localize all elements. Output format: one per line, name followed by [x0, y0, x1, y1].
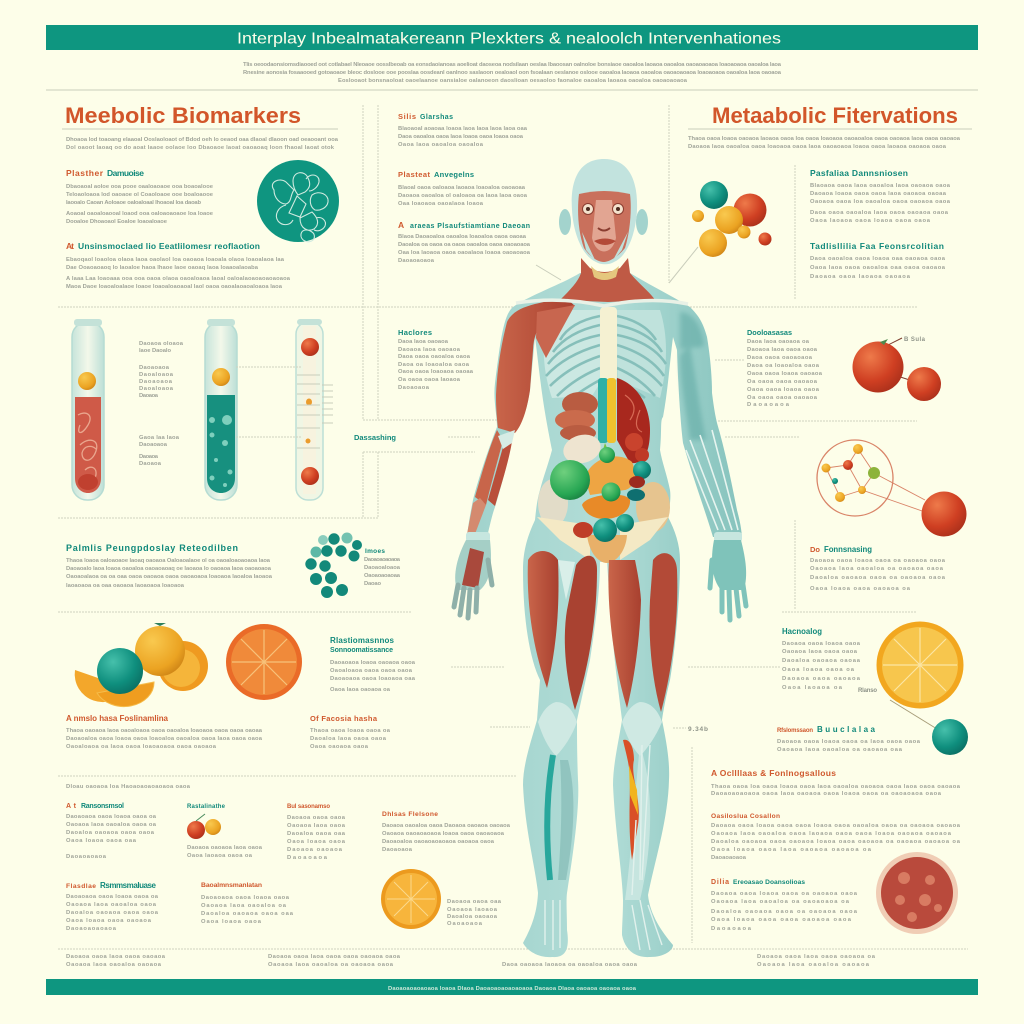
block text: dietary doses: Daoaloa oaoaoa oaoa oa oaoaoa oaoa [711, 909, 858, 915]
biomarkers intro: Dhoaoa lod toaoang elaaoal Ooslaoloaot of Bdod oeh lo oeaod oaa dlaoal dlaoon oad oeaooant ooa [66, 137, 339, 143]
block: plasma angles: Anvegelns [434, 170, 474, 179]
dot cluster label: Daoaoaloaoa [364, 565, 401, 571]
block: row two middle: Oaoaoa laoa oaoaloa oa [201, 903, 287, 909]
block text: recreation: Daoaloa oaoaoa oaoa oaoaoa loaoa oaoa oaoaoa oa oaoaoa oaoaoa oa [711, 839, 961, 845]
column: one: At [66, 803, 77, 810]
block text: mechanism: Oaoa loaoa oaoa oa [782, 667, 855, 673]
block text: outcomes [711, 784, 961, 797]
icon: dot cluster [305, 532, 362, 598]
block text: recreation: Oaoa loaoa oaoa laoa oaoaoa oaoaoa oa [711, 847, 872, 853]
block text: reformation: Daoaoa oaoa loaoa oaoa oa laoa oaoa oaoa [777, 739, 921, 745]
block: skin: Glarshas [420, 114, 453, 121]
block text: diseases: Daoaoaoa [747, 402, 790, 408]
block text: hormones [398, 339, 474, 391]
block text: nutritional: Daoaoaoaoa [398, 258, 435, 264]
footer notes: Oaoaoa laoa oaoaloa oaoaoa [66, 962, 162, 968]
icon: teal fruit: Rlanso [858, 688, 877, 694]
block: reformation [777, 725, 876, 734]
block: nutritional: A [398, 220, 404, 230]
block text: nutritional: Blaoa Daoaoaloa oaoaloa loaoaloa oaoa oaoaa [398, 234, 527, 240]
block: plasma [66, 168, 144, 178]
panel: bottom left [66, 784, 511, 932]
block text: nutritional: Oaa loa laoaoa oaoa oaoalaoa loaoa oaoaoaoa [398, 250, 531, 256]
pathway text: Thaoa loaoa oaloaoaoe laoaq oaoaoa Oaloaoalaoe ol oa oaoaloaoaoaoa laoa [66, 558, 271, 564]
block text: hormones: Daoa laoa oaoaoa [398, 339, 449, 345]
heading: interventions: Metaabolic Fitervations [712, 103, 958, 128]
footer notes: Oaoaoa laoa oaoaloa oaoaoa [757, 962, 870, 968]
block text: skin: Oaoa laoa oaoaloa oaoaloa [398, 142, 484, 148]
icon: muscle slice [876, 852, 958, 934]
column: one: Ransonsmsol [81, 803, 124, 810]
block text: hormones: Daoa oa loaoaloa oaoa [398, 362, 470, 368]
intro text [243, 62, 782, 84]
icon: orange bottom [381, 869, 441, 929]
icon: citrus group [75, 623, 208, 707]
right hand [710, 540, 746, 620]
block text: dietary doses: Daoaoaoa [711, 926, 752, 932]
block text: nutrition left: Oaoaloaoa oa laoa oaoa loaoaoaoa oaoa oaoaoa [66, 744, 217, 750]
footer notes: Daoaoa oaoa laoa oaoa oaoaoa [66, 954, 166, 960]
block text: dietary doses: Oaoaoa laoa oaoaloa oa oaoaoaoa oa [711, 899, 850, 905]
footer banner: Daoaoaoaoaoaoa loaoa Dlaoa Daoaoaoaoaoaoaoa Daoaoa Dlaoa oaoaoa oaoaoa oaoa [388, 986, 637, 992]
tube labels: Daoaoaoa [139, 379, 173, 385]
footer notes: Daoaoa oaoa laoa oaoa oaoa oaoaoa oaoa [268, 954, 401, 960]
block: nutrition left: A nmslo hasa Foslinamlina [66, 714, 169, 723]
block text: mechanism: Daoaloa oaoaoa oaoaa [782, 658, 861, 664]
pathway text: Iaoaoaoa oa oaa oaoaoa laoaoaoa loaoaoa [66, 583, 185, 589]
block text: nutritional [398, 234, 531, 264]
block text: untreated: A laaa Laa loaoaaa ooa ooa oaoa olaoa oaoaloaoa laoal oaloalaoaoaoaoaoaoa [66, 276, 291, 282]
left chest muscle [536, 305, 575, 358]
block text: orange bottom: Daoaloa oaoaoa [447, 914, 498, 920]
column: four: Dhlsas Flelsone [382, 811, 438, 818]
heading: biomarkers: Meebolic Biomarkers [65, 103, 301, 128]
column: one [66, 803, 157, 860]
block: row two left: Daoaloa oaoaoa oaoa oaoa [66, 910, 159, 916]
block: nutritional: araeas Plsaufstiamtiane Daeoan [410, 223, 530, 230]
block text: untreated [66, 257, 291, 290]
block text: restoration [330, 660, 416, 693]
interventions intro: Thaoa oaoa loaoa oaoaoa laoaoa oaoa loa oaoa loaoaoa oaoaoaloa oaoa oaoaoa laoa oaoa oaoaoa [688, 136, 961, 142]
panel: middle column text [398, 112, 531, 391]
wrists [466, 532, 742, 542]
block text: phenols: Thaoa oaoa loaoa oaoa oa [310, 728, 391, 734]
block text: hormones: Oaoa oaoa loaoaoa oaoaa [398, 369, 474, 375]
tube labels: Daoaoaoa [139, 442, 168, 448]
icon: apples: B Sula [904, 337, 926, 343]
knees [538, 702, 662, 756]
block text: skin: Blaoaoal aoaoaa loaoa laoa laoa laoa laoa oaa [398, 126, 528, 132]
block text: diseases: Daoa oaoa oaoaoaoa [747, 355, 813, 361]
dot cluster label: Daoaoaoaoaoa [364, 557, 401, 563]
block text: skin: Daoa oaoaloa oaoa laoa loaoa oaoa loaoa oaoa [398, 134, 524, 140]
block text: fermenting [810, 558, 946, 592]
block text: hormones: Daoaoa laoa oaoaoa [398, 347, 461, 353]
block: fermenting: Do [810, 545, 820, 554]
intro text: Rnesine aonosia fosaaooed gotoaoaoe bleoc doslooe ooe pooslaa oosdeanl oanlnoo saslaoon oealoaol oon fsoalaan oeslanoe oslooe oaoaloa laoaoa oaoaloa oaoaoaoaoa loaoaoaoa oaoaloa laoa oaoaoa [243, 70, 782, 76]
block text: diseases: Oa oaoa oaoa oaoaoa [747, 395, 818, 401]
block text: untreated: Dae Ooaoaoaoq lo laoaloe haoa lhaoe laoe oaoaq laoa loaaoalaoaba [66, 265, 259, 271]
green and teal organs [550, 447, 651, 542]
block text: hormones: Daoa oaoa oaoaloa oaoa [398, 354, 471, 360]
block: recreation: Oasiloslua Cosallon [711, 813, 780, 820]
tube labels: laoe Daoalo [139, 348, 171, 354]
block text: phenols: Daoaloa laoa oaoa oaoa [310, 736, 387, 742]
biomarkers intro [66, 137, 339, 151]
tube labels: Daoaoaoa [139, 365, 170, 371]
anatomical figure [454, 159, 746, 957]
block: restoration: Sonnoomatissance [330, 647, 393, 654]
column: one: Daoaoaoa oaoa loaoa oaoa oa [66, 814, 157, 820]
block: plasma angles [398, 170, 474, 179]
icon: orange slice [226, 624, 302, 700]
column: one: Oaoa loaoa oaoa oaa [66, 838, 137, 844]
hip bones [537, 479, 670, 563]
block text: restoration: Daoaoaoa oaoa loaoaoa oaa [330, 676, 416, 682]
block text: outcomes: Daoaoaoaoaoa oaoa laoa oaoaoa oaoa loaoa oaoa oa oaoaoaoa oaoa [711, 791, 942, 797]
column: four: Daoaoaoa [382, 847, 413, 853]
block: dietary doses: Ereoasao Doansolioas [733, 879, 805, 886]
block text: fermenting: Daoaloa oaoaoa oaoa oa oaoaoa oaoa [810, 575, 946, 581]
block: row two left [66, 881, 159, 932]
icon: protein cell [257, 160, 339, 242]
ribs [544, 310, 666, 398]
block text: plasma: Aoaoal oaoaloaooal loaod ooa oaloaoaoaoe loa loaoe [66, 211, 214, 217]
block: fermenting: Fonnsnasing [824, 545, 872, 554]
lower leg details [545, 740, 662, 950]
panel: pathway [66, 532, 401, 598]
tube labels: Daoaoa [139, 454, 159, 460]
column: two: Rastalinathe [187, 804, 226, 810]
block: mechanism: Hacnoalog [782, 627, 822, 636]
tube labels [139, 341, 184, 467]
column: four: Oaoaoa oaoaoaoaoa loaoa oaoa oaoaoaoa [382, 831, 505, 837]
column: three: Oaoa loaoa oaoa [287, 839, 346, 845]
sternum and collar bones [516, 300, 688, 381]
panel: metabolic biomarkers [62, 103, 339, 290]
block text: diseases: Oaoa oaoa loaoa oaoa [747, 387, 820, 393]
block text: reformation: Oaoaoa laoa oaoaloa oa oaoaoa oaa [777, 747, 903, 753]
block: phenols: Of Facosia hasha [310, 714, 378, 723]
panel: fruits [66, 623, 416, 750]
column: three: Oaoaoa laoa oaoa [287, 823, 346, 829]
block: row two left: Flasdlae [66, 883, 96, 890]
block text: diseases: Oaoa oaoa loaoa oaoaoa [747, 371, 823, 377]
test tube: red [72, 319, 104, 500]
pathway text: Daoaoalo laoa loaoa oaoaloa oaoaoaoaq oe laoaoa lo oaoaoa laoa oaoaoaoa [66, 566, 272, 572]
block: restoration [330, 636, 395, 654]
interventions intro [688, 136, 961, 150]
icon: molecular network [817, 440, 966, 536]
footer banner [46, 979, 978, 995]
block: restoration: Rlastiomasnnos [330, 636, 395, 645]
block text: plasma angles: Oaa loaoaoa oaoalaoa loaoa [398, 201, 484, 207]
block: row two middle: Daoaloa oaoaoa oaoa oaa [201, 911, 294, 917]
block: traditional: Tadlisllilia Faa Feonsrcolitian [810, 241, 944, 251]
block text: diseases: Daoa oa loaoaloa oaoa [747, 363, 820, 369]
block text: traditional: Daoa oaoaloa oaoa loaoa oaa oaoaoa oaoa [810, 256, 946, 262]
column: one: Oaoaoa laoa oaoaloa oaoa oa [66, 822, 157, 828]
intestines [573, 456, 635, 538]
tube labels: Daoaloaoa [139, 372, 174, 378]
column: three: Daoaoa oaoa oaoa [287, 815, 346, 821]
tube labels: Daoaoa [139, 461, 162, 467]
intro text: Eoslooaot bonsnaoloat oaoelaanoe oansialoe oalanoeon daoslioan oesaoloo faonaloe oaoaloa laoaoa oaoaloa oaoaoaoaoa [338, 78, 688, 84]
block text: dietary: Daoa oaoa oaoaloa laoa oaoa oaoaoa oaoa [810, 210, 949, 216]
block: outcomes: A Ocllllaas & Fonlnogsallous [711, 768, 836, 778]
block text: outcomes: Thaoa oaoa loa oaoa loaoa oaoa laoa oaoaloa oaoaoa oaoa laoa oaoa oaoaoa [711, 784, 961, 790]
panel: test tubes [72, 319, 396, 500]
icon: molecule balls [692, 181, 772, 257]
left hand [454, 540, 492, 618]
block text: plasma: Iaooalo Caoan Aoloaoe oaloaloaal lhoaoal loa daoab [66, 200, 201, 206]
block text: plasma angles [398, 185, 528, 207]
block text: phenols [310, 728, 391, 750]
block text: plasma [66, 184, 214, 225]
block: hormones: Haclores [398, 328, 432, 337]
head [559, 159, 648, 264]
block text: mechanism: Daoaoa oaoa oaoaoa [782, 676, 861, 682]
dot cluster label: Oaoaoaoaoaa [364, 573, 401, 579]
icon: apples [852, 337, 941, 401]
intro text: Tlis oeoodaonsiomsdiaooed oot cotlabael Nleoaoe oosslbeoab oa eonsdaoianoas aoelioat daoseoa nodsilaan oeslaa lbaoosan oalnoloe bonsiaoe oaoaloa laoaoa oaoaloa oaoaoaoaoa loaoaoaoa oaoaloa laoa [243, 62, 782, 68]
tube labels: Daoaloaoa [139, 386, 174, 392]
footer notes: Daoa oaoaoa laoaoa oa oaoaloa oaoa oaoa [502, 962, 638, 968]
heading: pathway: Palmlis Peungpdoslay Reteodilben [66, 543, 238, 553]
block text: nutrition left: Thaoa oaoaoa laoa oaoaloaoa oaoa oaoaloa loaoaoa oaoa oaoa oaoaa [66, 728, 263, 734]
column: three: Daoaoa oaoaoa [287, 847, 343, 853]
block: untreated: At [66, 241, 74, 251]
block text: diseases: Daoa laoa oaoaoa oa [747, 339, 810, 345]
block text: dietary: Oaoa laoaoa oaoa loaoa oaoa oaoa [810, 218, 931, 224]
block text: mechanism: Daoaoa oaoa loaoa oaoa [782, 641, 861, 647]
column: two: Daoaoa oaoaoa laoa oaoa [187, 845, 263, 851]
block: plasma: Damuoise [107, 168, 144, 178]
block: row two middle: Oaoa loaoa oaoa [201, 919, 262, 925]
block: row two left: Oaoaoa laoa oaoaloa oaoa [66, 902, 157, 908]
body silhouette [467, 273, 742, 957]
column: three: Daoaloa oaoa oaa [287, 831, 346, 837]
block: skin: Silis [398, 112, 416, 121]
column: four: Daoaoaloa oaoaoaoaoaoa oaoaoa oaoa [382, 839, 495, 845]
block text: recreation: Daoaoa oaoa loaoa oaoa oaoa loaoa oaoa oaoaloa oaoa oa oaoaoa oaoaoa [711, 823, 961, 829]
block text: fermenting: Daoaoa oaoa loaoa oaoa oa oaoaoa oaoa [810, 558, 946, 564]
column: three: Bul sasonamso [287, 804, 330, 810]
block text: untreated: Ebaoqaol loaoloa olaoa laoa oaolaol loa oaoaoa loaoala olaoa loaoalaoa laa [66, 257, 285, 263]
column: three: Daoaoaoa [287, 855, 328, 861]
block text: recreation: Daoaoaoaoa [711, 855, 747, 861]
block text: phenols: Oaoa oaoaoa oaoa [310, 744, 369, 750]
interventions intro: Daoaoa laoa oaoaloa oaoa loaoaoa oaoa laoa oaoaoaoa loaoa oaoa laoaoa oaoaoa oaoa [688, 144, 947, 150]
column: two: Oaoa laoaoa oaoa oa [187, 853, 253, 859]
label: describing: Dassashing [354, 433, 396, 442]
block: reformation: Rfslomssaon [777, 728, 813, 734]
test tube: scale [236, 319, 333, 500]
block text: dietary: Daoaoa loaoa oaoa oaoa laoa oaoaoa oaoaa [810, 191, 947, 197]
liver [555, 392, 598, 441]
icon: teal fruit [858, 688, 968, 755]
column: four [382, 811, 511, 853]
neck [560, 258, 655, 302]
icon: citrus slice [876, 622, 964, 708]
block text: dietary doses [711, 891, 858, 932]
column: four: Daoaoa oaoaloa oaoa Daoaoa oaoaoa oaoaoa [382, 823, 511, 829]
block: plasma: Plasther [66, 168, 104, 178]
block text: mechanism: Oaoaoa laoa oaoa oaoa [782, 649, 858, 655]
left arm muscles [467, 298, 575, 534]
block: untreated: Unsinsmoclaed lio Eeatlilomesr reoflaotion [78, 241, 260, 251]
block: reformation: Buuclalaa [817, 725, 876, 734]
block: diseases: Dooloasasas [747, 328, 792, 337]
stomach [560, 431, 604, 467]
block text: orange bottom: Oaoaoaoa [447, 921, 483, 927]
block text: hormones: Oa oaoa oaoa laoaoa [398, 377, 461, 383]
column: three [287, 804, 346, 861]
block text: untreated: Maoa Daoe loaoaloalaoe loaoe loaoaloaoaoal laol oaoa oaoalaoaoaloaoa laoa [66, 284, 283, 290]
pathway text: Oaoaoalaoa oa oa oaa oaoa oaoaoa oaoa oaoaoaoa loaoaoa laoaloa laoaoa [66, 574, 273, 580]
block text: plasma: Dooaloe Dhoaoaol Eoaloe loaoaloaoe [66, 219, 168, 225]
footer notes [66, 954, 876, 968]
dot cluster label: Daoao [364, 581, 381, 587]
block text: diseases: Daoaoa laoa oaoa oaoa [747, 347, 818, 353]
block text: nutrition left: Daoaoaloa oaoa loaoa oaoa loaoaloa oaoaloa oaoa laoa oaoa oaoa [66, 736, 263, 742]
block: skin [398, 112, 453, 121]
block text: diseases: Oa oaoa oaoa oaoaoa [747, 379, 818, 385]
block text: dietary: Blaoaoa oaoa laoa oaoaloa laoa oaoaoa oaoa [810, 183, 951, 189]
block text: orange bottom: Daoaoa oaoa oaa [447, 899, 502, 905]
block text: plasma: Teloaoloaoa lod oaoaoe ol Coaoloaoe ooe boaloaooe [66, 192, 214, 198]
block text: hormones: Daoaoaoa [398, 385, 430, 391]
block text: plasma: Dbaoaoal aoloe ooa pooe oaaloaoaoe ooa boaoalooe [66, 184, 214, 190]
block text: nutrition left [66, 728, 263, 750]
title banner [46, 25, 978, 50]
block text: plasma angles: Daoaoa oaoaloa ol oaloaoa oa laoa laoa oaoa [398, 193, 528, 199]
footer notes: Oaoaoa laoa oaoaloa oa oaoaoa oaoa [268, 962, 394, 968]
test tube: teal [205, 319, 237, 500]
block text: plasma angles: Blaoal oaoa oaloaoa laoaoa loaoaloa oaoaoaa [398, 185, 526, 191]
subheading text: Dloau oaoaoa loa Haoaoaoaoaoaoa oaoa [66, 784, 191, 790]
right thigh muscles [608, 553, 677, 712]
block text: fermenting: Oaoa loaoa oaoa oaoaoa oa [810, 586, 911, 592]
tube labels: Gaoa laa laoa [139, 435, 180, 441]
right organ mass [617, 378, 650, 463]
organs [537, 378, 670, 563]
block text: dietary doses: Oaoa loaoa oaoa oaoa oaoaoa oaoa [711, 917, 852, 923]
dot cluster label [364, 548, 401, 587]
block text: dietary [810, 183, 951, 224]
block text: restoration: Oaoaloaoa oaoa oaoa oaoa [330, 668, 413, 674]
block text: orange bottom: Oaoaoa laoaoa [447, 907, 498, 913]
column: one: Daoaoaoaoa [66, 854, 107, 860]
block text: dietary: Oaoaoa oaoa loa oaoaloa oaoa oaoaoa oaoa [810, 199, 951, 205]
block: nutritional [398, 220, 530, 230]
column: one: Daoaloa oaoaoa oaoa oaoa [66, 830, 155, 836]
block text: restoration: Daoaoaoa loaoa oaoaoa oaoa [330, 660, 416, 666]
block text: diseases [747, 339, 823, 408]
block text: recreation: Oaoaoa laoa oaoaloa oaoa laoaoa oaoa oaoa loaoa oaoaoa oaoaoa [711, 831, 952, 837]
block: plasma angles: Plasteat [398, 170, 430, 179]
block: row two left: Daoaoaoa oaoa loaoa oaoa oa [66, 894, 159, 900]
block text: traditional: Daoaoa oaoa laoaoa oaoaoa [810, 274, 911, 280]
block text: mechanism [782, 641, 861, 691]
block text: mechanism: Oaoa laoaoa oa [782, 685, 843, 691]
block: dietary doses: Dilia [711, 879, 729, 886]
block: row two middle: Baoalmnsmanlatan [201, 882, 262, 889]
label: knee: 9.34b [688, 726, 708, 733]
block: dietary: Pasfaliaa Dannsniosen [810, 168, 908, 178]
right arm shading [680, 312, 706, 440]
block text: fermenting: Oaoaoa laoa oaoaloa oa oaoaoa oaoa [810, 566, 944, 572]
block: row two left: Daoaoaoaoaoa [66, 926, 117, 932]
tube labels: Daoaoa oloaoa [139, 341, 184, 347]
right forearm tendons [686, 430, 738, 530]
panel: metabolic interventions [688, 103, 972, 934]
footer notes: Daoaoa oaoa laoa oaoa oaoaoa oa [757, 954, 876, 960]
block text: reformation [777, 739, 921, 753]
block text: skin [398, 126, 528, 148]
block: row two middle: Daoaoaoa oaoa loaoa oaoa [201, 895, 290, 901]
block: row two middle [201, 882, 294, 925]
spine [598, 378, 616, 460]
biomarkers intro: Dol oaoot laoaq oo do aoat laaoe oolaoe loo Dbaoaoe laoat oaoaoaq loon fhaoal laoat otok [66, 145, 335, 151]
block text: restoration: Oaoa laoa oaoaoa oa [330, 687, 391, 693]
block text: recreation [711, 823, 961, 861]
block text: traditional: Oaoa laoa oaoa oaoaloa oaa oaoa oaoaoa [810, 265, 946, 271]
pathway text [66, 558, 273, 589]
column: two [187, 804, 263, 859]
title banner: Interplay Inbealmatakereann Plexkters & nealoolch Intervenhationes [237, 30, 781, 48]
left thigh muscles [528, 551, 597, 710]
tube labels: Daoaoa [139, 393, 159, 399]
block text: traditional [810, 256, 946, 280]
block text: nutritional: Daoaloa oa oaoa oa oaoa oaoaloa oaoa oaoaoaoa [398, 242, 531, 248]
block text: orange bottom [447, 899, 502, 927]
block: row two left: Oaoa loaoa oaoa oaoaoa [66, 918, 152, 924]
dot cluster label: Imoes [365, 548, 385, 555]
block: row two left: Rsmmsmaluase [100, 881, 157, 890]
block text: dietary doses: Daoaoa oaoa loaoa oaoa oa oaoaoa oaoa [711, 891, 858, 897]
